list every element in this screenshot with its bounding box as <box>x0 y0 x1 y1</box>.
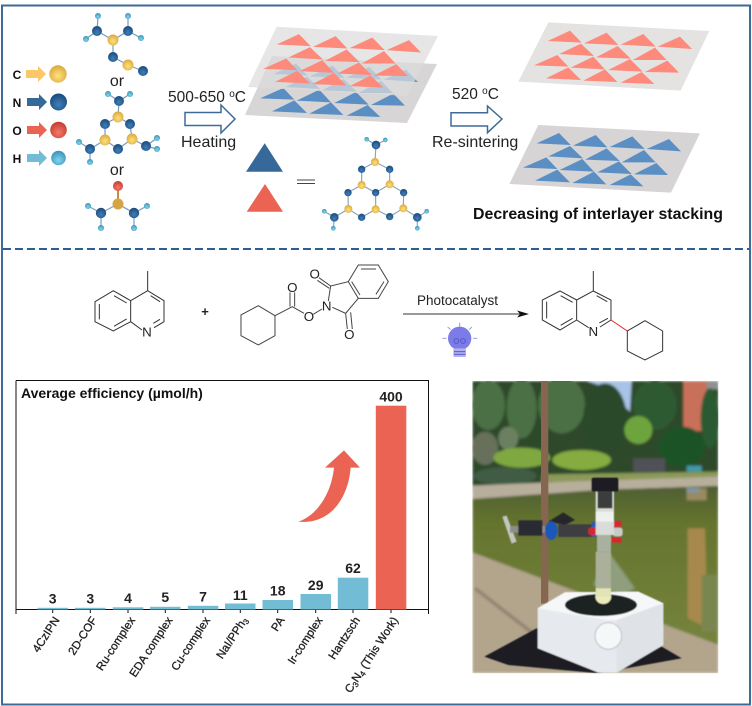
bar values: 5 <box>161 589 169 605</box>
chart axis ticks <box>16 609 428 614</box>
reactant: NHPI ester: O <box>287 280 297 295</box>
label: or: or <box>110 73 125 90</box>
category labels: Cu-complex <box>170 615 213 673</box>
category labels <box>31 615 402 696</box>
molecule: urea <box>85 181 150 231</box>
label: heating: Heating <box>181 134 236 151</box>
bar values: 400 <box>379 389 403 405</box>
legend: nitrogen: N <box>13 96 21 110</box>
bar values: 3 <box>86 590 94 606</box>
plus sign: + <box>201 304 209 319</box>
chart frame <box>16 380 428 610</box>
legend triangle: red layer <box>247 184 283 212</box>
category labels: 3 <box>351 680 361 689</box>
arrow: re-sintering <box>451 106 502 133</box>
legend: oxygen: O <box>12 124 22 138</box>
bar values: 62 <box>345 560 361 576</box>
bar values: 29 <box>308 577 324 593</box>
reactant: NHPI ester: O <box>309 266 320 281</box>
section divider <box>3 248 749 250</box>
curved arrow <box>298 450 360 522</box>
photo: reactor by the pond <box>472 377 719 673</box>
photo: clamp <box>502 516 517 544</box>
reactant: NHPI ester: N <box>322 299 331 314</box>
category labels: 4 <box>358 669 368 678</box>
category labels: N <box>350 671 365 685</box>
category labels: Ru-complex <box>95 615 138 673</box>
arrow: heating <box>185 105 235 133</box>
category labels: 3 <box>241 617 252 626</box>
category labels: PA <box>270 615 288 634</box>
lower plane <box>245 56 437 123</box>
label: photocatalyst: Photocatalyst <box>417 293 498 308</box>
category labels: EDA complex <box>128 615 176 680</box>
category labels: C <box>343 682 358 695</box>
re-sintering temperature label: C <box>488 86 499 103</box>
stacked layers <box>245 27 438 123</box>
separated layer: blue <box>509 125 700 193</box>
heating temperature label: o <box>229 89 235 100</box>
category labels: (This Work) <box>357 615 401 674</box>
bar values: 18 <box>270 582 286 598</box>
atom legend <box>12 65 67 166</box>
category labels: NaI/PPh <box>215 619 248 661</box>
category labels: 2D-COF <box>67 615 100 658</box>
reactant: 4-methylquinoline <box>95 271 164 339</box>
reactant: NHPI ester: O <box>344 327 354 342</box>
re-sintering temperature label: o <box>482 86 488 97</box>
photo: black base <box>484 628 682 673</box>
photo: white stirrer <box>538 592 663 673</box>
reactant: NHPI ester <box>241 265 388 345</box>
chart title: Average efficiency (µmol/h) <box>21 385 203 401</box>
photo: tube <box>596 492 614 535</box>
pink triangles <box>263 34 421 87</box>
bar chart <box>16 380 428 696</box>
product: 2-cyclohexyl-4-methylquinoline: N <box>588 324 598 339</box>
molecule: cyanoguanidine <box>83 13 148 76</box>
re-sintering temperature label: 520 <box>452 86 478 103</box>
bar values: 4 <box>124 590 132 606</box>
bars <box>38 406 406 610</box>
bar values: 3 <box>49 590 57 606</box>
equals sign <box>297 180 315 184</box>
bar values: 11 <box>233 587 248 603</box>
reactant: NHPI ester: O <box>304 309 314 324</box>
bar values <box>49 389 403 606</box>
legend: carbon: C <box>13 68 22 82</box>
molecule: melamine <box>76 91 160 165</box>
heating temperature label: C <box>235 89 246 106</box>
separated layer: pink <box>518 22 709 91</box>
caption: decreasing of interlayer stacking: Decreasing of interlayer stacking <box>473 206 723 223</box>
icon: light bulb <box>442 323 477 357</box>
upper plane <box>248 27 438 96</box>
product: 2-cyclohexyl-4-methylquinoline <box>542 271 663 360</box>
bar values: 7 <box>199 588 207 604</box>
heating temperature label: 500-650 <box>168 89 225 106</box>
molecule: heptazine unit <box>322 137 429 231</box>
label: re-sintering: Re-sintering <box>432 134 518 151</box>
willow foliage <box>472 377 585 438</box>
legend triangle: blue layer <box>246 143 283 172</box>
blue triangles <box>260 64 418 117</box>
photo: cap <box>592 478 618 492</box>
reactant: 4-methylquinoline: N <box>142 324 152 339</box>
arrow: photocatalyst <box>403 310 529 318</box>
category labels: 4CzIPN <box>31 615 63 655</box>
category labels: Ir-complex <box>286 615 326 667</box>
hedges <box>493 448 550 468</box>
category labels: Hantzsch <box>327 615 363 662</box>
photo: stand rod <box>541 381 548 604</box>
label: or: or <box>110 162 125 179</box>
legend: hydrogen: H <box>13 152 21 166</box>
